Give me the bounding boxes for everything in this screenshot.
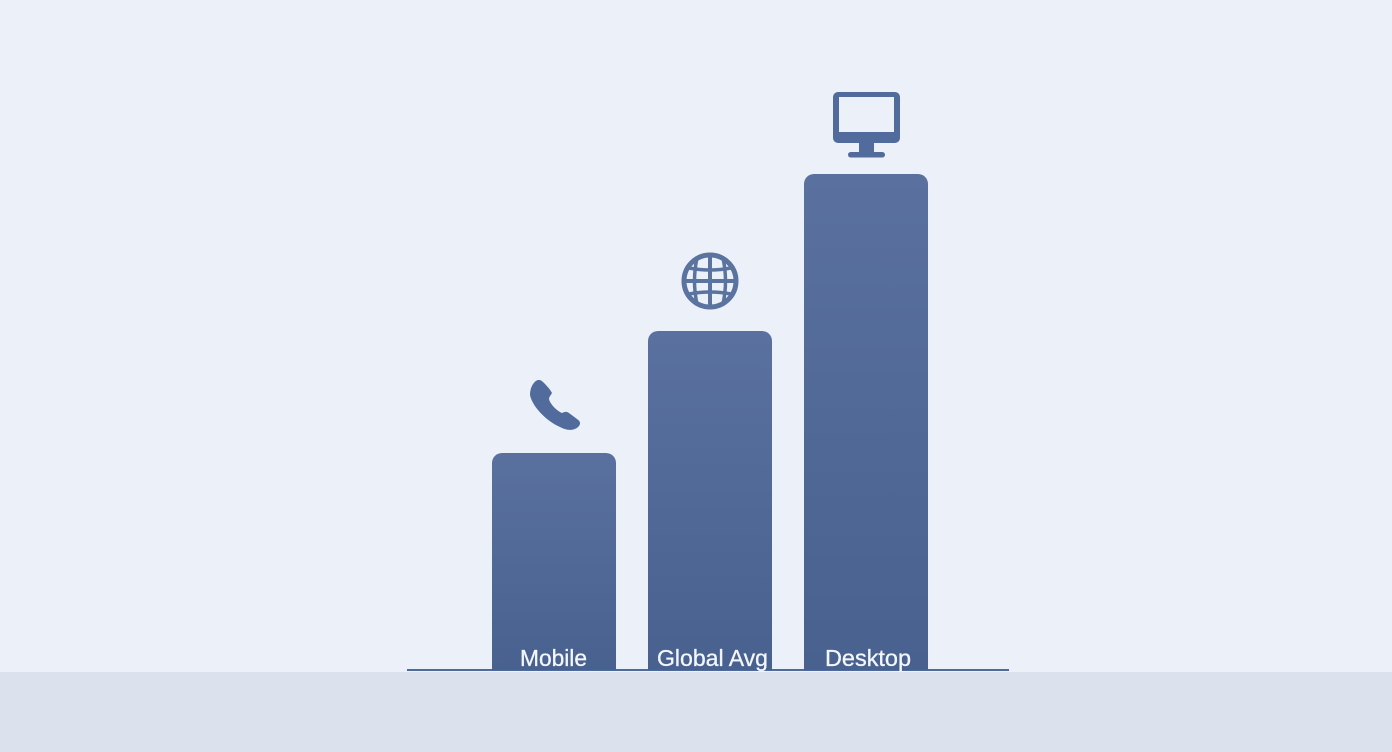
bar: Global Avg <box>648 331 772 671</box>
bar: Mobile <box>492 453 616 671</box>
floor band <box>0 672 1392 752</box>
label: Global Avg: Global Avg <box>657 645 768 671</box>
label: Mobile: Mobile <box>520 645 587 671</box>
label: Desktop: Desktop <box>825 645 911 671</box>
bar: Desktop <box>804 174 928 671</box>
icon: globe <box>684 255 736 307</box>
icon: phone handset <box>530 380 580 430</box>
baseline <box>407 669 1009 671</box>
icon: desktop monitor <box>833 92 900 158</box>
